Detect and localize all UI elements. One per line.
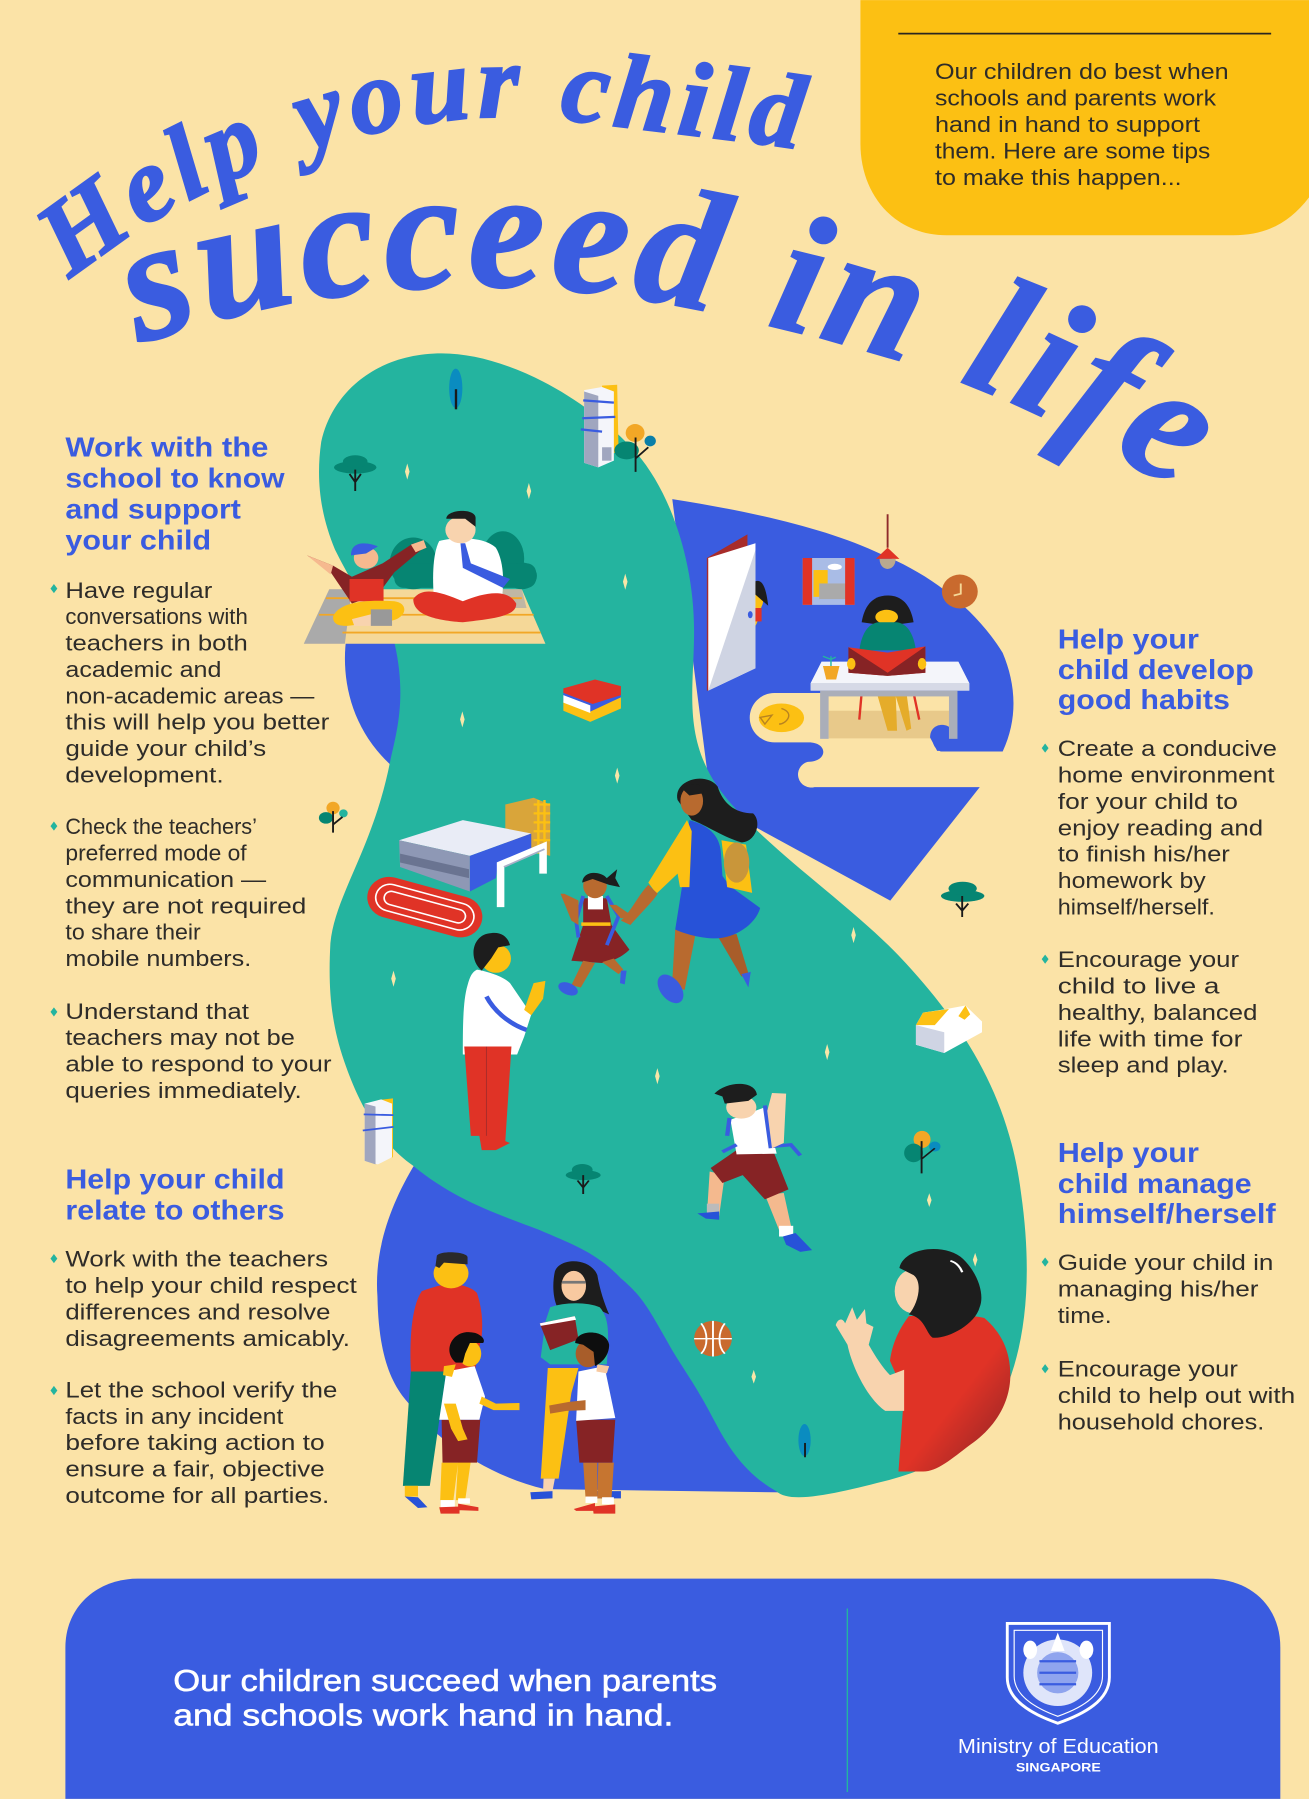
text block: home environment bbox=[1042, 736, 1277, 919]
ministry name bbox=[958, 1736, 1159, 1774]
heading: Help your child bbox=[65, 1164, 285, 1195]
text block: balanced life: sleep and play. bbox=[1058, 1053, 1229, 1078]
icon: door bbox=[707, 534, 768, 691]
text block: home environment: home environment bbox=[1058, 762, 1275, 787]
text block: mode of communication: Check the teachers’ bbox=[65, 814, 257, 839]
text block: mode of communication: they are not required bbox=[65, 893, 306, 918]
text block: home environment: enjoy reading and bbox=[1058, 815, 1263, 840]
icon: stack of books bbox=[563, 679, 621, 722]
icon: hanging lamp bbox=[876, 514, 899, 569]
icon: sleeping cat bbox=[759, 704, 804, 732]
heading: and support bbox=[65, 494, 241, 525]
gym bbox=[399, 820, 544, 907]
illustration: school building and track bbox=[362, 798, 550, 942]
icon: white house bbox=[916, 1005, 982, 1053]
text block: balanced life: healthy, balanced bbox=[1058, 1000, 1257, 1025]
panel: manage himself or herself bbox=[1042, 1137, 1295, 1435]
text block: balanced life: life with time for bbox=[1058, 1026, 1242, 1051]
text block: response times: queries immediately. bbox=[65, 1078, 302, 1103]
text block: verify the facts: outcome for all parties. bbox=[65, 1483, 329, 1508]
text block: managing time bbox=[1042, 1250, 1273, 1328]
illustration: teacher in red trousers bbox=[463, 933, 545, 1150]
text block: mode of communication: preferred mode of bbox=[65, 840, 248, 865]
text block: respect differences: differences and resolve bbox=[65, 1299, 330, 1324]
text block: home environment: for your child to bbox=[1058, 789, 1238, 814]
girl reading bbox=[859, 596, 916, 650]
text block: regular conversations: academic and bbox=[65, 657, 221, 682]
title bbox=[36, 52, 1208, 478]
illustration: waving parent bbox=[836, 1249, 1010, 1472]
running track bbox=[362, 872, 488, 942]
illustration: parents, teacher and two schoolboys bbox=[403, 1252, 621, 1514]
icon: Ministry of Education crest bbox=[1007, 1623, 1109, 1723]
icon: bottom blue tree bbox=[798, 1424, 811, 1457]
text block: respect differences bbox=[50, 1247, 357, 1351]
intro callout: hand in hand to support bbox=[935, 112, 1200, 137]
text block: verify the facts: before taking action to bbox=[65, 1430, 325, 1455]
title: succeed in life bbox=[128, 188, 1208, 478]
text block: balanced life: Encourage your bbox=[1058, 947, 1239, 972]
closing message bbox=[173, 1663, 717, 1733]
intro callout: schools and parents work bbox=[935, 86, 1216, 111]
heading bbox=[65, 432, 285, 556]
text block: regular conversations: guide your child’s bbox=[65, 736, 266, 761]
text block: respect differences: Work with the teachers bbox=[65, 1247, 328, 1272]
icon: centre green tree bbox=[566, 1164, 601, 1194]
desk bbox=[811, 656, 969, 739]
text block: household chores: child to help out with bbox=[1058, 1383, 1295, 1408]
icon: blue tree bbox=[449, 369, 462, 409]
text block: home environment: to finish his/her bbox=[1058, 842, 1230, 867]
heading: child manage bbox=[1058, 1168, 1252, 1199]
icon: left tower building bbox=[363, 1098, 393, 1164]
footer banner bbox=[65, 1579, 1280, 1799]
icon: tower building bbox=[581, 385, 619, 467]
floor and legs bbox=[829, 693, 951, 751]
text block: verify the facts: Let the school verify the bbox=[65, 1377, 337, 1402]
father bbox=[403, 1252, 482, 1508]
text block: household chores bbox=[1042, 1357, 1295, 1435]
text block: regular conversations: conversations with bbox=[65, 604, 248, 629]
illustration: running boy bbox=[697, 1084, 812, 1252]
heading bbox=[65, 1164, 285, 1226]
heading: Help your bbox=[1058, 1137, 1199, 1168]
text block: response times: able to respond to your bbox=[65, 1052, 332, 1077]
ministry name: Ministry of Education bbox=[958, 1736, 1159, 1758]
schoolboy left bbox=[439, 1332, 519, 1514]
heading bbox=[1058, 623, 1254, 715]
text block: managing time: time. bbox=[1058, 1303, 1112, 1328]
heading: Work with the bbox=[65, 432, 268, 463]
icon: small orange tree bbox=[319, 802, 348, 833]
heading: child develop bbox=[1058, 654, 1254, 685]
panel: good habits bbox=[1042, 623, 1277, 1078]
closing message: and schools work hand in hand. bbox=[173, 1698, 673, 1733]
icon: basketball bbox=[694, 1321, 732, 1357]
illustration: mother and daughter walking bbox=[556, 779, 760, 1008]
text block: regular conversations bbox=[50, 578, 329, 787]
icon: green tree bbox=[334, 455, 376, 491]
heading: good habits bbox=[1058, 684, 1230, 715]
heading: himself/herself bbox=[1058, 1198, 1277, 1229]
schoolboy right bbox=[549, 1332, 615, 1514]
text block: managing time: Guide your child in bbox=[1058, 1250, 1273, 1275]
icon: window bbox=[803, 558, 855, 605]
text block: regular conversations: Have regular bbox=[65, 578, 212, 603]
panel: relate to others bbox=[50, 1164, 357, 1508]
text block: home environment: homework by bbox=[1058, 868, 1206, 893]
text block: respect differences: disagreements amicably. bbox=[65, 1326, 350, 1351]
red book bbox=[847, 646, 926, 676]
heading: school to know bbox=[65, 463, 285, 494]
text block: regular conversations: non-academic areas — bbox=[65, 683, 315, 708]
tower block bbox=[505, 798, 550, 856]
icon: right green tree bbox=[941, 882, 984, 917]
text block: home environment: himself/herself. bbox=[1058, 894, 1215, 919]
central landscape blob bbox=[319, 353, 1027, 1497]
intro callout: Our children do best when bbox=[935, 59, 1229, 84]
intro callout bbox=[860, 0, 1309, 235]
intro callout: to make this happen... bbox=[935, 165, 1182, 190]
text block: home environment: Create a conducive bbox=[1058, 736, 1277, 761]
text block: verify the facts: ensure a fair, objective bbox=[65, 1457, 325, 1482]
heading: Help your bbox=[1058, 623, 1199, 654]
icon: right orange tree bbox=[904, 1131, 940, 1173]
text block: mode of communication: mobile numbers. bbox=[65, 946, 251, 971]
text block: regular conversations: teachers in both bbox=[65, 631, 248, 656]
text block: regular conversations: development. bbox=[65, 762, 224, 787]
icon: small trees and buildings bbox=[319, 369, 984, 917]
text block: respect differences: to help your child respect bbox=[65, 1273, 357, 1298]
text block: household chores: Encourage your bbox=[1058, 1357, 1238, 1382]
illustration: parent and teacher on mat bbox=[304, 511, 545, 644]
icon: orange and teal tree bbox=[614, 424, 656, 472]
text block: mode of communication bbox=[50, 814, 306, 971]
heading: relate to others bbox=[65, 1195, 285, 1226]
intro callout: them. Here are some tips bbox=[935, 138, 1210, 163]
panel: work with the school bbox=[50, 432, 332, 1103]
heading: your child bbox=[65, 525, 211, 556]
text block: response times bbox=[50, 999, 332, 1103]
text block: managing time: managing his/her bbox=[1058, 1276, 1259, 1301]
text block: mode of communication: to share their bbox=[65, 920, 201, 945]
text block: mode of communication: communication — bbox=[65, 867, 266, 892]
text block: verify the facts bbox=[50, 1377, 337, 1508]
icon: clock bbox=[942, 575, 978, 608]
text block: balanced life bbox=[1042, 947, 1257, 1078]
closing message: Our children succeed when parents bbox=[173, 1663, 717, 1698]
title: Help your child bbox=[36, 52, 812, 281]
text block: balanced life: child to live a bbox=[1058, 974, 1221, 999]
teacher with book bbox=[530, 1261, 621, 1499]
text block: regular conversations: this will help you better bbox=[65, 710, 329, 735]
text block: response times: teachers may not be bbox=[65, 1025, 295, 1050]
text block: verify the facts: facts in any incident bbox=[65, 1404, 283, 1429]
illustration: child studying at home bbox=[707, 514, 978, 751]
text block: household chores: household chores. bbox=[1058, 1410, 1264, 1435]
text block: response times: Understand that bbox=[65, 999, 249, 1024]
heading bbox=[1058, 1137, 1277, 1229]
ministry name: SINGAPORE bbox=[1016, 1760, 1101, 1774]
